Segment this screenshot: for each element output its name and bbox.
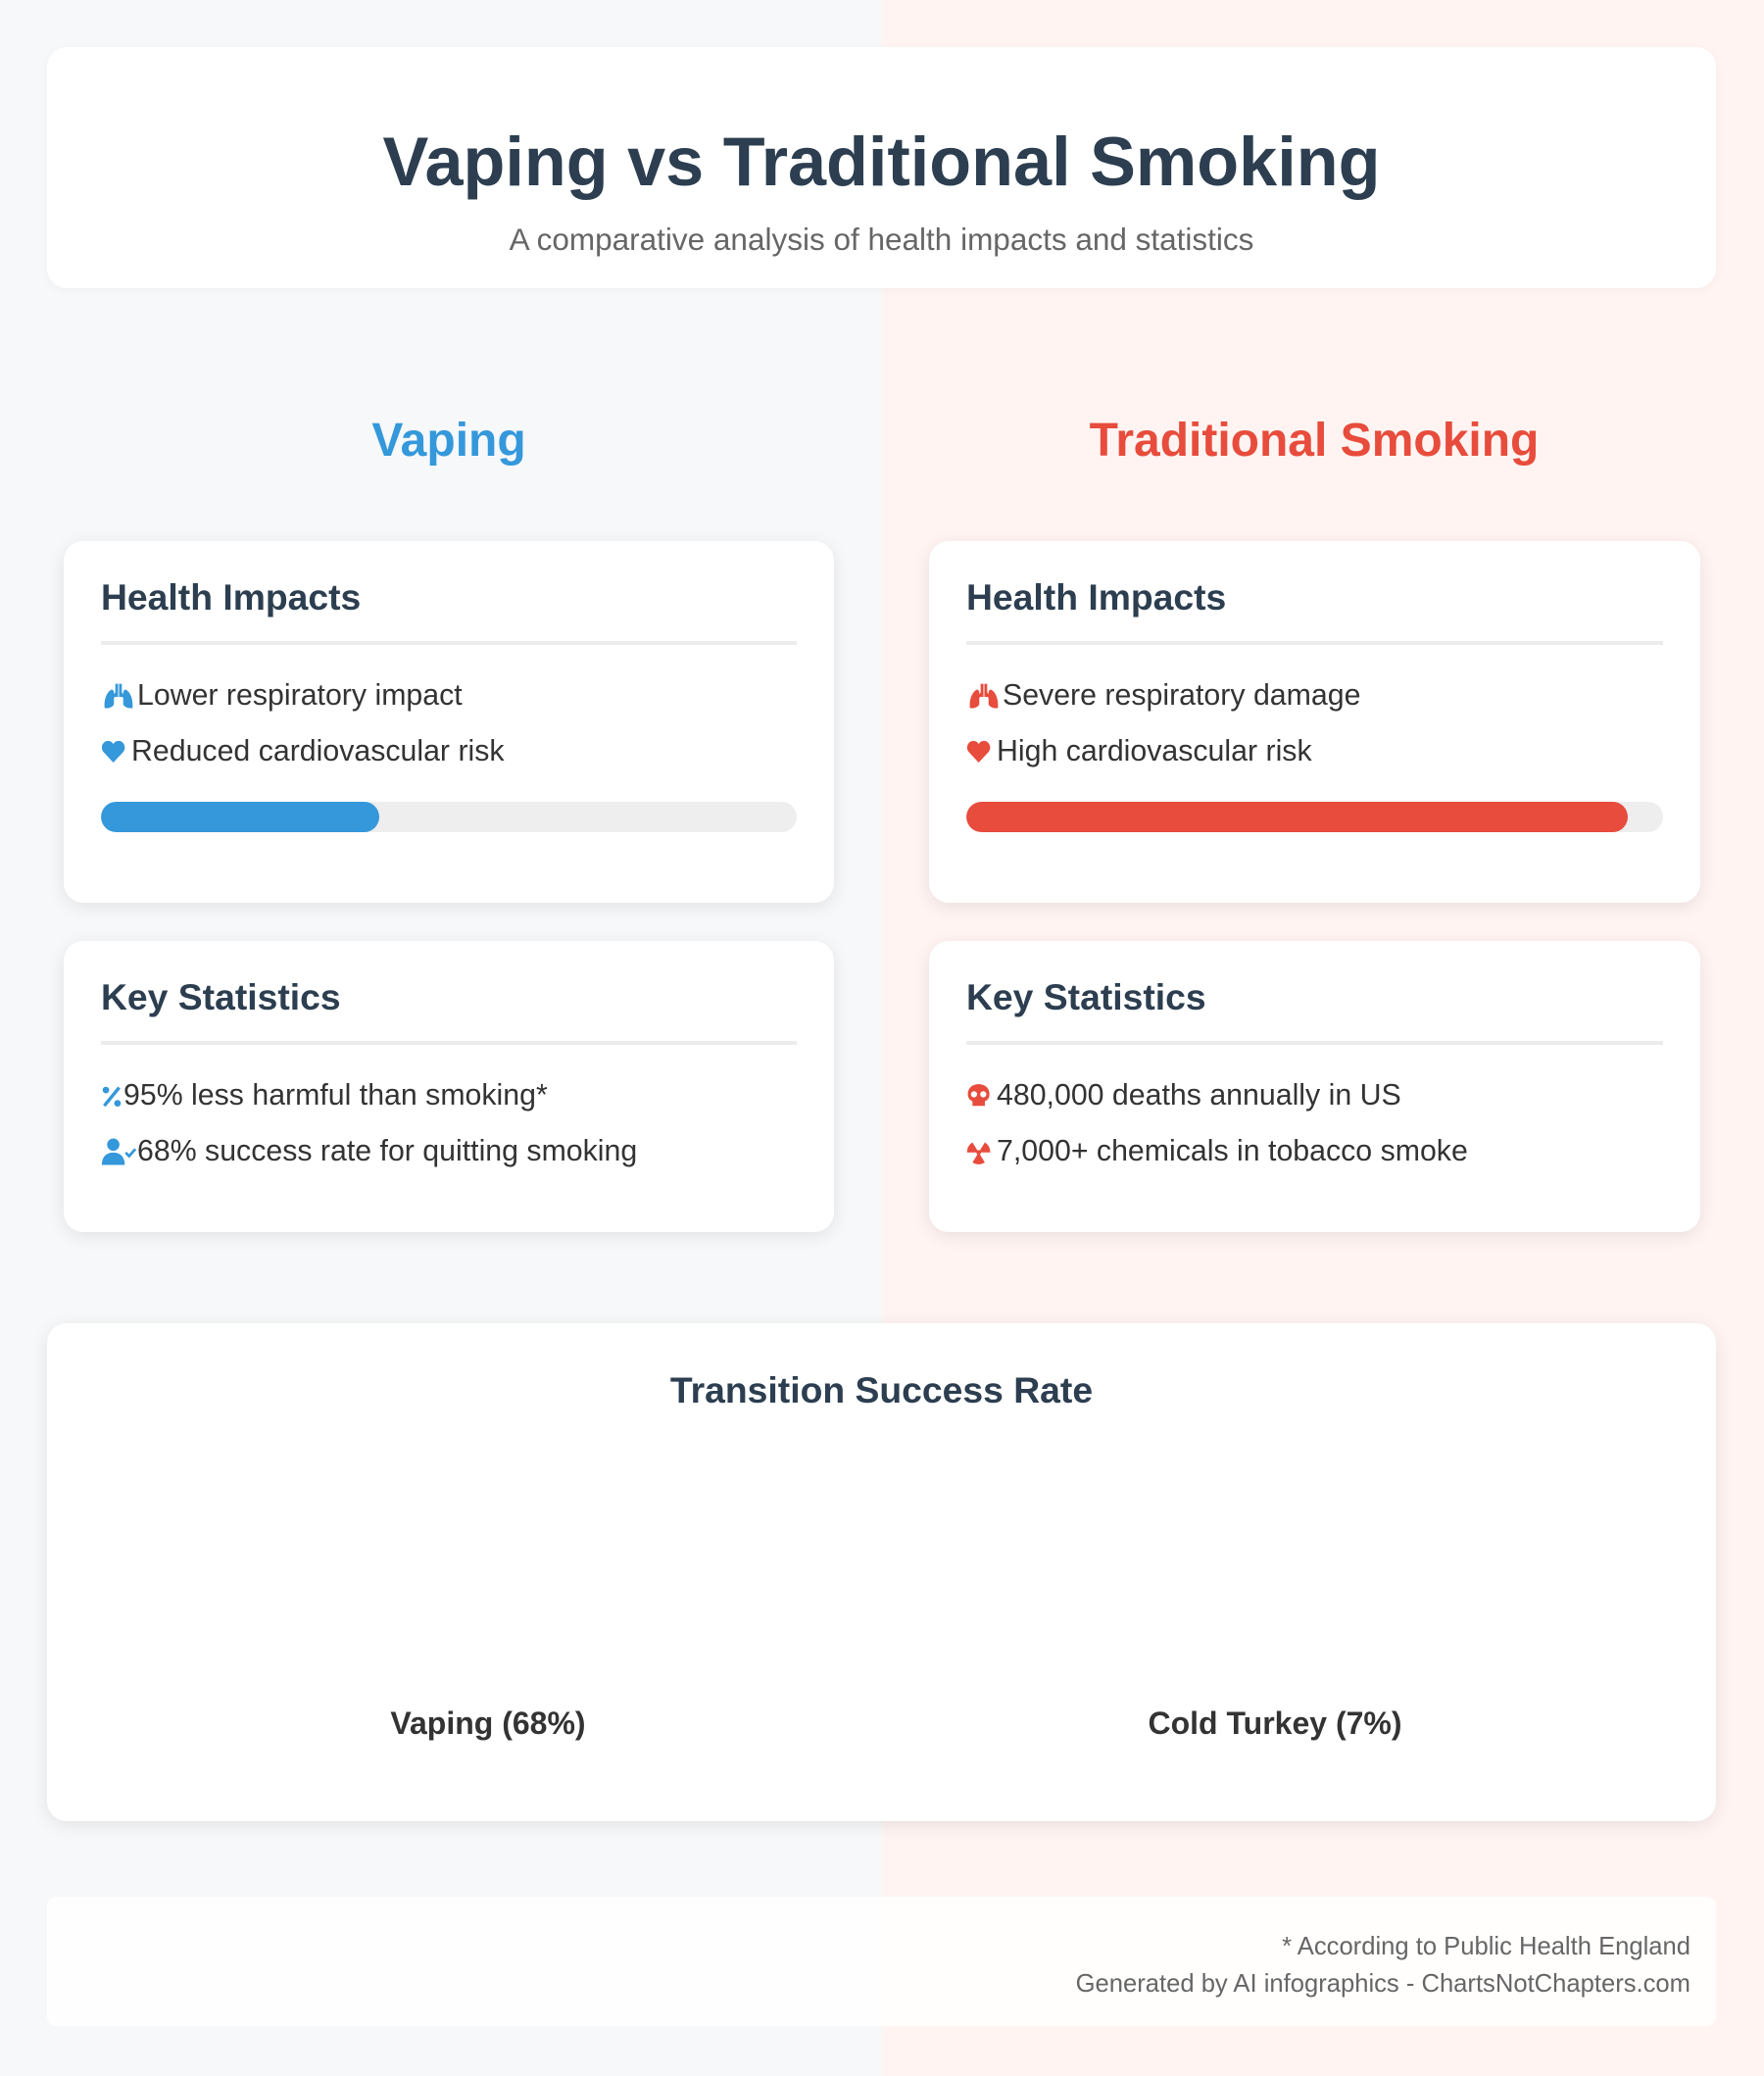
panel: vaping health impacts [64,541,834,903]
panel: vaping key statistics [64,941,834,1232]
title: Vaping vs Traditional Smoking [383,123,1380,200]
item: percent: 95% less harmful than smoking* [123,1079,548,1112]
item: user check: 68% success rate for quitting smoking [137,1135,637,1167]
item: heart: Reduced cardiovascular risk [131,735,505,767]
progress bar [966,802,1663,832]
subtitle: A comparative analysis of health impacts and statistics [510,222,1253,257]
item: lungs: Severe respiratory damage [1003,679,1360,712]
item: radiation: 7,000+ chemicals in tobacco smoke [997,1135,1468,1167]
card title: Health Impacts [966,576,1226,618]
footnote text: Generated by AI infographics - ChartsNotChapters.com [1076,1970,1690,1998]
heading: traditional smoking: Traditional Smoking [1090,415,1539,467]
label: vaping: Vaping (68%) [390,1705,586,1741]
card title: Health Impacts [101,576,361,618]
footnote text [1076,1933,1690,1998]
footnote text: * According to Public Health England [1282,1933,1690,1960]
header card [47,47,1716,288]
footer [47,1897,1716,2026]
heading: vaping: Vaping [371,415,526,467]
item: skull: 480,000 deaths annually in US [997,1079,1401,1112]
item: lungs: Lower respiratory impact [137,679,463,712]
panel: smoking key statistics [929,941,1700,1232]
panel: transition success rate [47,1323,1716,1821]
card title: Key Statistics [966,976,1206,1017]
panel: smoking health impacts [929,541,1700,903]
item: heart: High cardiovascular risk [997,735,1312,767]
card title: Key Statistics [101,976,341,1017]
progress bar [101,802,797,832]
label: cold turkey: Cold Turkey (7%) [1149,1705,1401,1741]
chart title: Transition Success Rate [670,1369,1093,1410]
